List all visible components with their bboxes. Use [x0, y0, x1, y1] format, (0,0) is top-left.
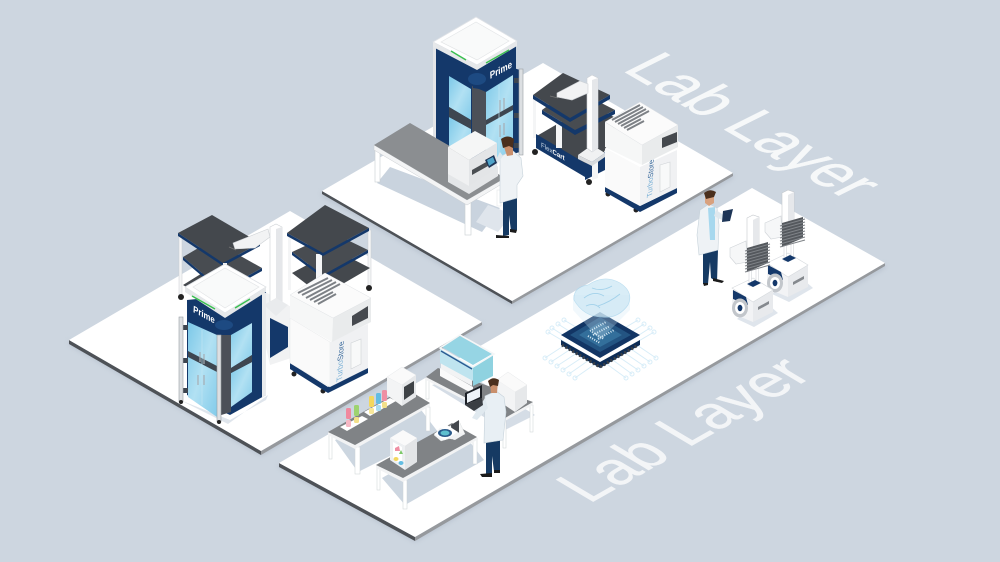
TurboStore unit, upper floor: TurboStore — [645, 157, 656, 199]
TurboStore unit, left floor: TurboStore — [334, 339, 346, 383]
table — [374, 123, 505, 235]
bench with tubes and incubator — [328, 367, 438, 474]
FlexCart robot station — [532, 73, 620, 185]
Prime automation cabinet, upper floor: Prime — [490, 59, 512, 82]
TurboStore unit, left floor — [290, 273, 371, 394]
right shelving rack — [287, 205, 372, 296]
bench with flask cabinet and analyser — [376, 420, 484, 509]
platform: right lab floor — [279, 188, 885, 542]
Prime automation cabinet, left floor: Prime — [193, 304, 215, 326]
incubator — [387, 367, 416, 406]
label: Lab Layer (lower): Lab Layer — [540, 347, 826, 511]
chip package — [561, 312, 640, 368]
platform: left lab floor — [69, 211, 482, 456]
liquid-handling hood — [440, 335, 494, 394]
circuit traces — [543, 318, 658, 380]
shelving stacks and robot, left floor — [178, 205, 372, 365]
coloured sample tubes — [340, 390, 396, 431]
left shelving rack — [178, 215, 262, 310]
scientist with tablet, right floor — [697, 190, 733, 286]
Prime automation cabinet, upper floor — [433, 17, 523, 165]
mobile lab robot, rear — [765, 190, 813, 302]
analyser — [434, 420, 465, 441]
label: Lab Layer (upper): Lab Layer — [608, 44, 899, 207]
plate reader instrument — [448, 131, 498, 194]
TurboStore unit, upper floor — [605, 102, 678, 212]
Prime automation cabinet, left floor — [179, 264, 268, 424]
scientist with tablet — [485, 136, 523, 238]
AI chip with brain hologram — [543, 279, 658, 380]
table with instrument, upper floor — [374, 17, 523, 238]
flask cabinet — [390, 430, 417, 470]
scientist with laptop — [465, 378, 506, 477]
platform: upper lab floor — [322, 63, 733, 306]
box instrument — [497, 372, 527, 412]
bench with liquid-handling hood — [426, 335, 535, 448]
central robot column — [229, 224, 300, 365]
brain hologram — [573, 279, 630, 340]
mobile lab robot, front — [730, 215, 778, 327]
FlexCart robot station: FlexCart — [541, 142, 565, 163]
